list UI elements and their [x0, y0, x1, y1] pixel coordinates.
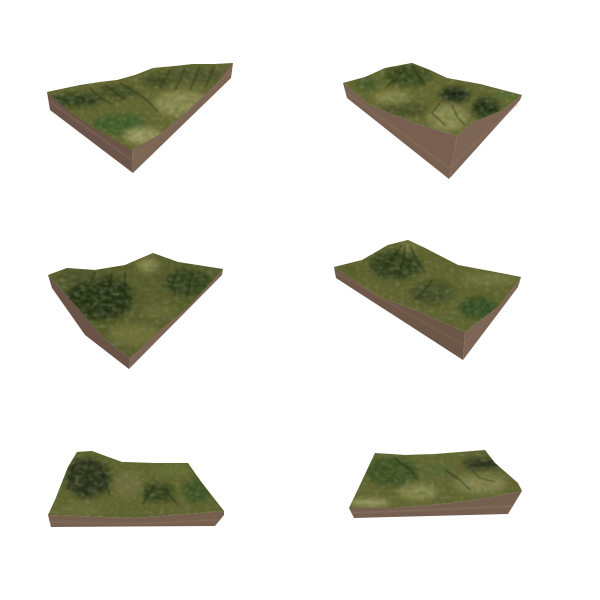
terrain block 3: middle left [48, 253, 223, 369]
block 3 ridges [85, 270, 192, 318]
terrain block 5: bottom left [48, 451, 224, 527]
block 1 left side [47, 92, 133, 173]
block 6 ridges [395, 458, 495, 490]
block 1 ridges [90, 66, 215, 112]
block 2 left side [343, 83, 457, 179]
block 1 right side [132, 63, 233, 173]
terrain block 1: top left [47, 63, 233, 173]
terrain block 6: bottom right [345, 446, 525, 518]
terrain block 2: top right [343, 63, 522, 179]
block 5 front side [48, 511, 224, 527]
block 5 ridges [68, 458, 178, 505]
block 4 right side [463, 277, 521, 360]
infographic: six 3D terrain blocks [47, 63, 522, 527]
block 6 front side [349, 491, 522, 518]
block 5 top surface [48, 451, 224, 518]
block 4 top surface [334, 240, 521, 332]
block 2 right side [449, 95, 522, 179]
block 1 top surface [47, 63, 233, 150]
block 3 left side [48, 275, 130, 369]
block 4 ridges [378, 245, 432, 300]
terrain block 4: middle right [334, 240, 521, 360]
block 2 ridges [385, 66, 465, 125]
block 4 left side [334, 267, 465, 360]
block 3 top surface [48, 253, 223, 358]
block 3 right side [129, 269, 223, 369]
block 6 top surface [349, 450, 522, 508]
block 2 top surface [343, 63, 522, 136]
